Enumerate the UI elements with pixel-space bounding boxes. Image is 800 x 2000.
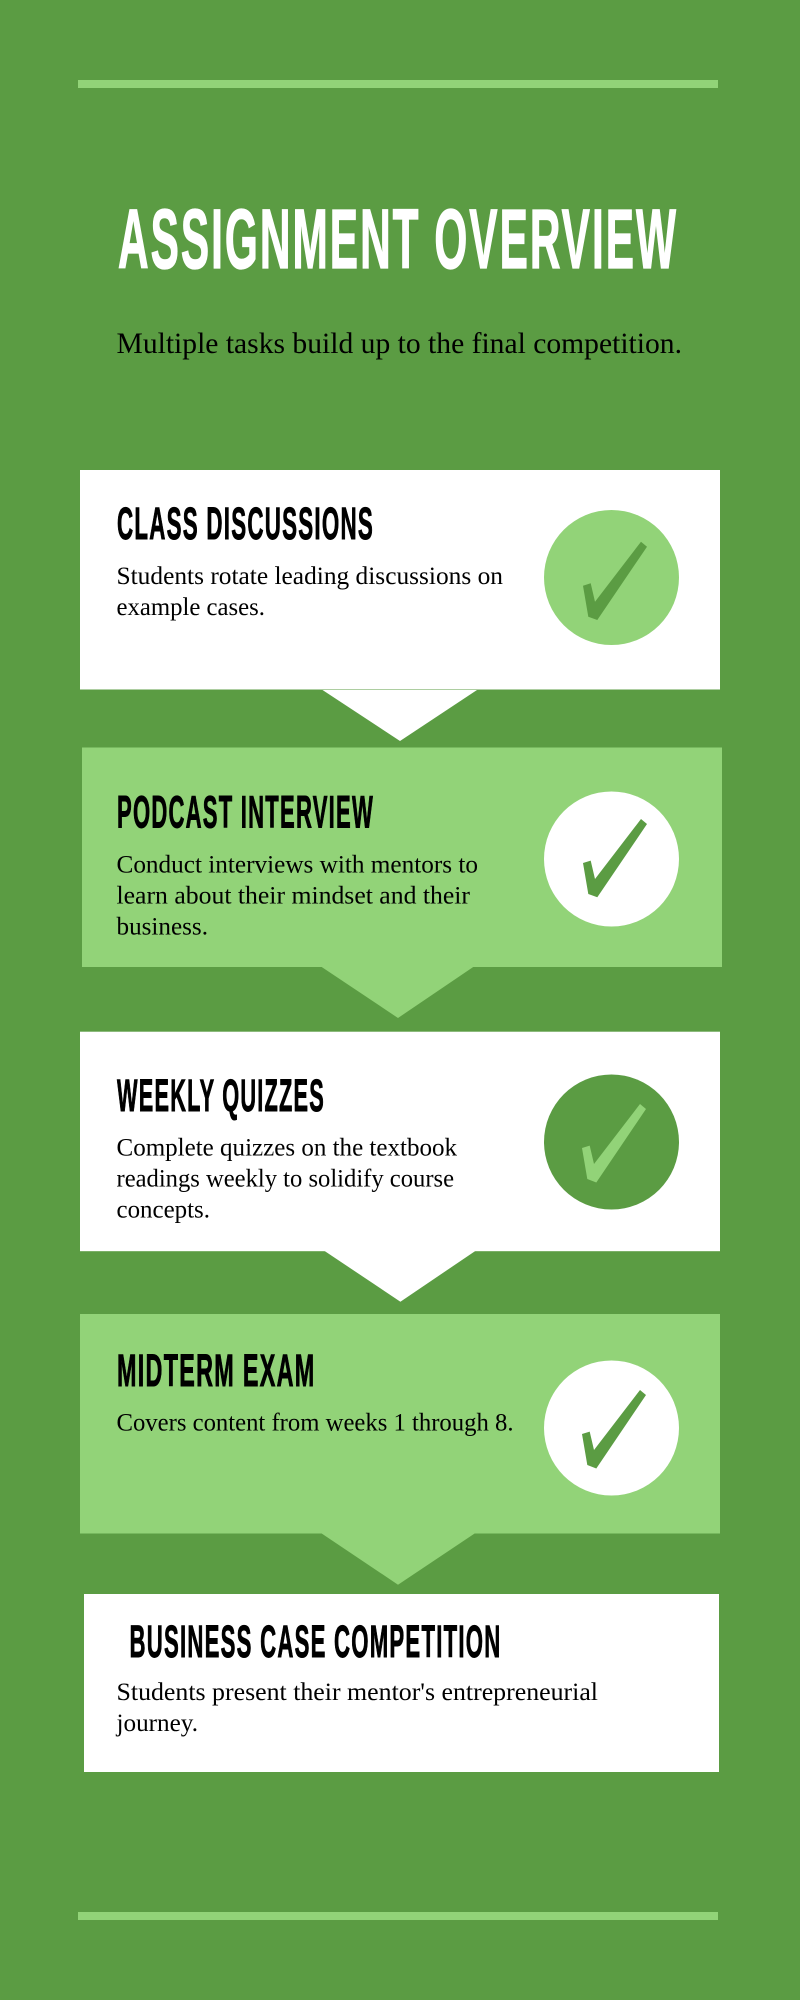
panel: podcast interview <box>82 748 722 1018</box>
text block: class discussions: example cases. <box>116 592 265 621</box>
text block: podcast interview <box>116 850 478 940</box>
panel: class discussions <box>80 470 720 741</box>
text block: weekly quizzes: Complete quizzes on the textbook <box>116 1133 457 1162</box>
icon: check mark circle <box>544 792 679 926</box>
text block: midterm exam: Covers content from weeks 1 through 8. <box>116 1408 514 1437</box>
bottom accent bar <box>78 1912 718 1920</box>
card background with arrow <box>80 1314 720 1585</box>
icon: check mark circle <box>544 510 679 645</box>
heading: midterm exam: MIDTERM EXAM <box>117 1345 316 1396</box>
text block: weekly quizzes: concepts. <box>116 1195 210 1224</box>
subtitle: Multiple tasks build up to the final competition. <box>116 328 682 360</box>
panel: podcast interview: PODCAST INTERVIEW <box>117 787 374 838</box>
card background with arrow <box>82 748 722 1018</box>
icon: check mark circle <box>544 1074 679 1210</box>
card background with arrow <box>80 470 720 741</box>
panel: class discussions: CLASS DISCUSSIONS <box>117 498 374 549</box>
text block: business case competition: journey. <box>116 1708 198 1737</box>
text block: podcast interview: learn about their mindset and their <box>116 880 471 910</box>
text block: class discussions: Students rotate leading discussions on <box>116 561 503 590</box>
card background <box>84 1594 719 1772</box>
text block: weekly quizzes <box>116 1133 457 1224</box>
text block: podcast interview: business. <box>116 911 208 940</box>
top accent bar <box>78 80 718 88</box>
text block: business case competition: Students present their mentor's entrepreneurial <box>116 1677 598 1706</box>
text block: class discussions <box>116 561 503 621</box>
panel: weekly quizzes: WEEKLY QUIZZES <box>117 1070 325 1121</box>
icon: check mark circle <box>544 1360 679 1496</box>
text block: weekly quizzes: readings weekly to solidify course <box>116 1164 454 1193</box>
text block: podcast interview: Conduct interviews with mentors to <box>116 850 478 879</box>
card background with arrow <box>80 1032 720 1302</box>
text block: business case competition <box>116 1677 598 1737</box>
panel: weekly quizzes <box>80 1032 720 1302</box>
panel: business case competition <box>84 1594 719 1772</box>
panel: midterm exam <box>80 1314 720 1585</box>
